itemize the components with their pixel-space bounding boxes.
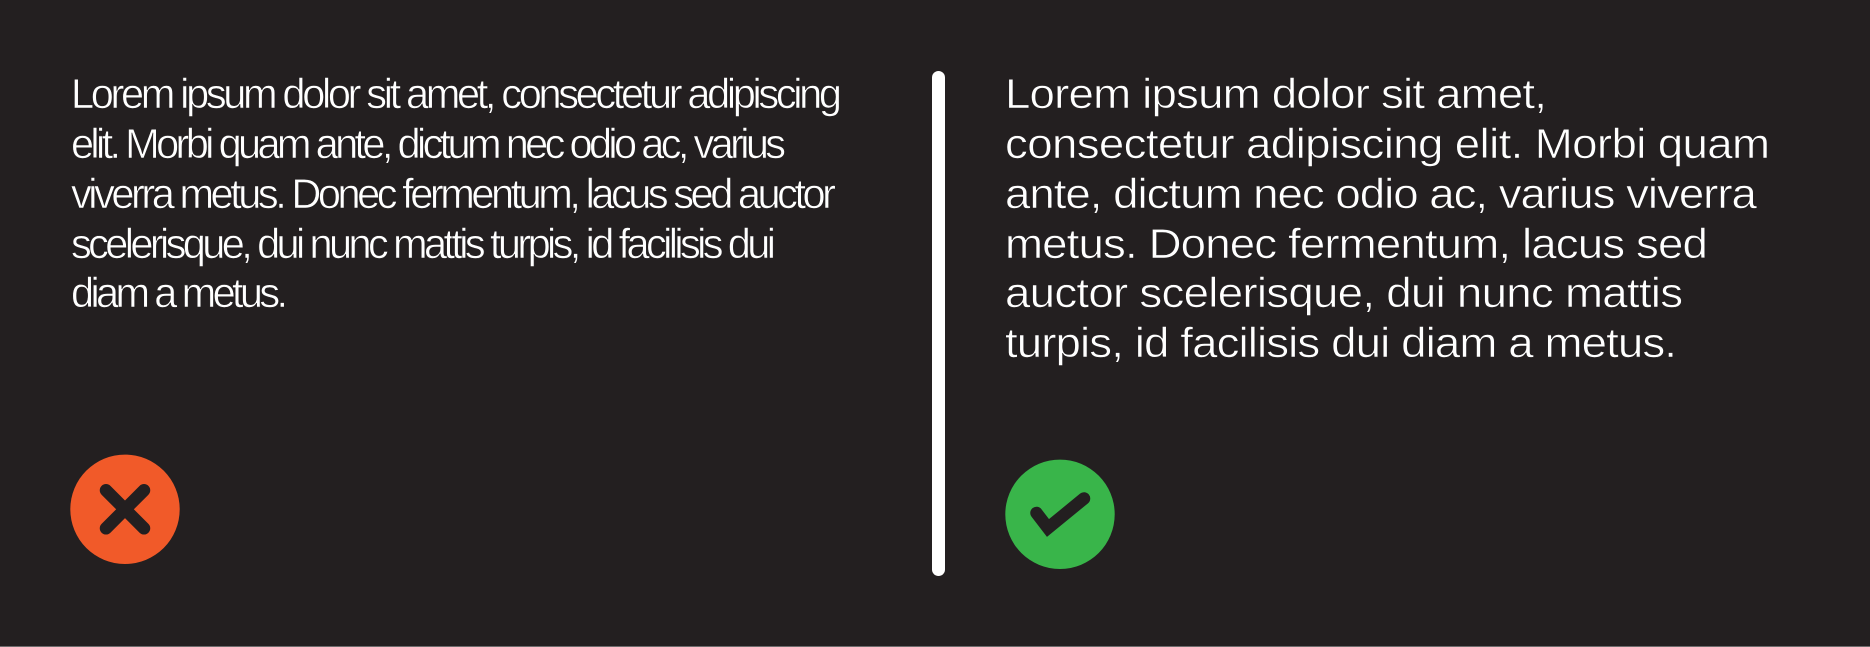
text block: tight-spaced example: Lorem ipsum dolor sit amet, consectetur adipiscing <box>71 70 842 117</box>
text block: well-spaced example: Lorem ipsum dolor sit amet, <box>1005 72 1547 118</box>
text block: tight-spaced example: diam a metus. <box>71 269 288 316</box>
text block: well-spaced example: consectetur adipiscing elit. Morbi quam <box>1005 122 1770 168</box>
divider <box>932 71 945 576</box>
text block: tight-spaced example: elit. Morbi quam ante, dictum nec odio ac, varius <box>71 120 786 167</box>
icon: orange cross <box>70 455 180 564</box>
text block: well-spaced example <box>1005 72 1770 367</box>
text block: well-spaced example: ante, dictum nec odio ac, varius viverra <box>1005 172 1758 218</box>
text block: tight-spaced example: viverra metus. Donec fermentum, lacus sed auctor <box>71 170 836 217</box>
text block: tight-spaced example <box>71 70 842 316</box>
icon: green check <box>1005 460 1115 569</box>
text block: well-spaced example: metus. Donec fermentum, lacus sed <box>1005 222 1708 268</box>
text block: well-spaced example: auctor scelerisque, dui nunc mattis <box>1005 271 1683 317</box>
text block: tight-spaced example: scelerisque, dui nunc mattis turpis, id facilisis dui <box>71 220 776 267</box>
text block: well-spaced example: turpis, id facilisis dui diam a metus. <box>1005 321 1677 367</box>
